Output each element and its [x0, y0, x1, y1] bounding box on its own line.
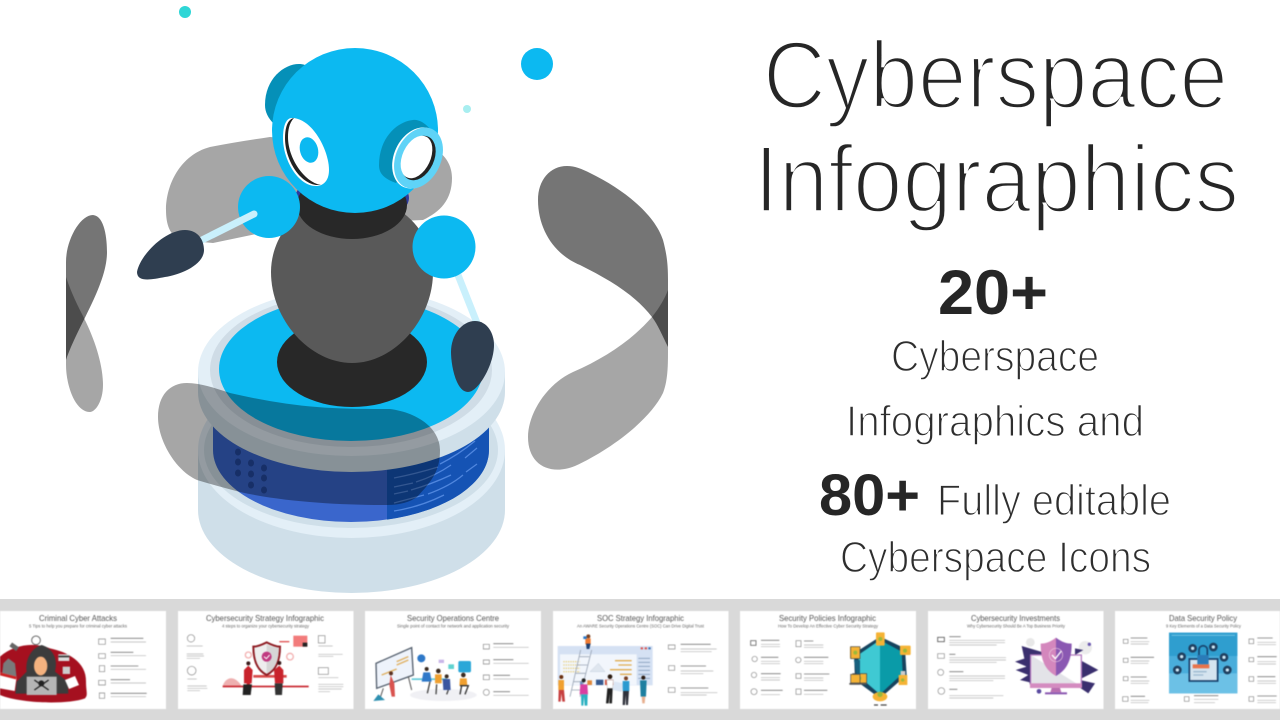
blob: behind robot head — [166, 137, 452, 243]
lock illustration — [1169, 633, 1237, 693]
heading: How To Develop An Effective Cyber Security Strategy — [778, 624, 879, 628]
thumbnail: Security Operations Centre — [365, 611, 541, 709]
bullet list — [1123, 638, 1277, 703]
policy list — [751, 640, 829, 695]
heading — [1166, 613, 1242, 628]
shield illustration — [223, 636, 309, 695]
heading: Security Policies Infographic — [779, 613, 877, 623]
shield illustration — [850, 632, 911, 705]
thumbnail: Security Policies Infographic — [740, 611, 916, 709]
stat: 20+ Cyberspace Infographics and: Infographics and — [846, 397, 1144, 446]
bullet list — [938, 637, 1006, 698]
team and board illustration — [373, 648, 477, 701]
platform: blue screen band — [213, 415, 489, 522]
stat: 80+ Fully editable Cyberspace Icons — [819, 463, 1171, 582]
screen: code lines — [394, 441, 477, 511]
robot: body — [271, 197, 433, 363]
robot: left arm — [137, 176, 300, 279]
heading — [967, 613, 1066, 628]
title: Cyberspace Infographics — [754, 22, 1239, 233]
heading: Cybersecurity Investments — [971, 613, 1060, 623]
heading: 4 steps to organize your cybersecurity strategy — [222, 624, 310, 628]
heading — [397, 613, 510, 628]
robot: left eye — [283, 118, 329, 186]
heading — [577, 613, 705, 628]
thumbnail: Cybersecurity Strategy Infographic — [178, 611, 354, 709]
heading: Security Operations Centre — [407, 613, 499, 623]
hacker illustration — [0, 636, 87, 702]
robot: head — [272, 48, 438, 213]
thumbnail: Cybersecurity Investments — [928, 611, 1104, 709]
blob: left twist — [66, 215, 107, 412]
heading: Single point of contact for network and application security — [397, 624, 510, 628]
heading: Data Security Policy — [1169, 613, 1238, 623]
side notes — [187, 635, 343, 692]
title: Cyberspace Infographics: Infographics — [754, 126, 1239, 233]
robot: back ear — [265, 64, 310, 124]
title: Cyberspace Infographics: Cyberspace — [763, 22, 1228, 129]
thumbnail: Data Security Policy — [1115, 611, 1280, 709]
dashboard illustration — [558, 634, 653, 706]
screen: dot grid — [235, 448, 267, 494]
stat: 80+ Fully editable Cyberspace Icons: Cyberspace Icons — [840, 533, 1151, 582]
stat: 80+ Fully editable Cyberspace Icons: 80+ — [819, 463, 920, 528]
decorative dot: teal — [179, 6, 191, 18]
heading — [778, 613, 879, 628]
heading: An AWARE Security Operations Centre (SOC) Can Drive Digital Trust — [577, 624, 705, 628]
decorative dot: blue — [521, 48, 553, 80]
thumbnail: Criminal Cyber Attacks — [0, 611, 166, 709]
robot: neck — [295, 171, 409, 239]
heading: SOC Strategy Infographic — [597, 613, 685, 623]
stat: 20+ Cyberspace Infographics and — [846, 258, 1144, 446]
decorative dot: tiny teal — [242, 152, 246, 156]
illustration: robot on platform — [66, 6, 668, 593]
shield left node — [849, 647, 860, 685]
heading: 9 Key Elements of a Data Security Policy — [1166, 624, 1242, 628]
thumbnail: SOC Strategy Infographic — [553, 611, 728, 709]
heading: Why Cybersecurity Should Be A Top Business Priority — [967, 624, 1066, 628]
heading: Criminal Cyber Attacks — [39, 613, 117, 623]
decorative dot: pale teal — [463, 105, 471, 113]
heading: Cybersecurity Strategy Infographic — [206, 613, 325, 623]
heading — [206, 613, 325, 628]
platform: upper disc — [198, 288, 505, 472]
heading: 5 Tips to help you prepare for criminal cyber attacks — [29, 624, 128, 628]
bullet list — [483, 644, 529, 695]
robot: right arm — [412, 216, 494, 392]
bullet list — [668, 644, 717, 695]
bullet list — [99, 638, 147, 698]
stat: 20+ Cyberspace Infographics and: 20+ — [938, 258, 1048, 328]
platform: lower cylinder — [198, 362, 505, 593]
thumbnail strip background — [0, 599, 1280, 720]
robot: right eye — [379, 119, 452, 197]
blob: right chevron — [528, 166, 668, 470]
stat: 80+ Fully editable Cyberspace Icons: Fully editable — [937, 476, 1171, 525]
shield and monitor illustration — [1015, 638, 1098, 694]
heading — [29, 613, 128, 628]
stat: 20+ Cyberspace Infographics and: Cyberspace — [891, 332, 1099, 381]
blob: lower overlay — [158, 383, 440, 505]
